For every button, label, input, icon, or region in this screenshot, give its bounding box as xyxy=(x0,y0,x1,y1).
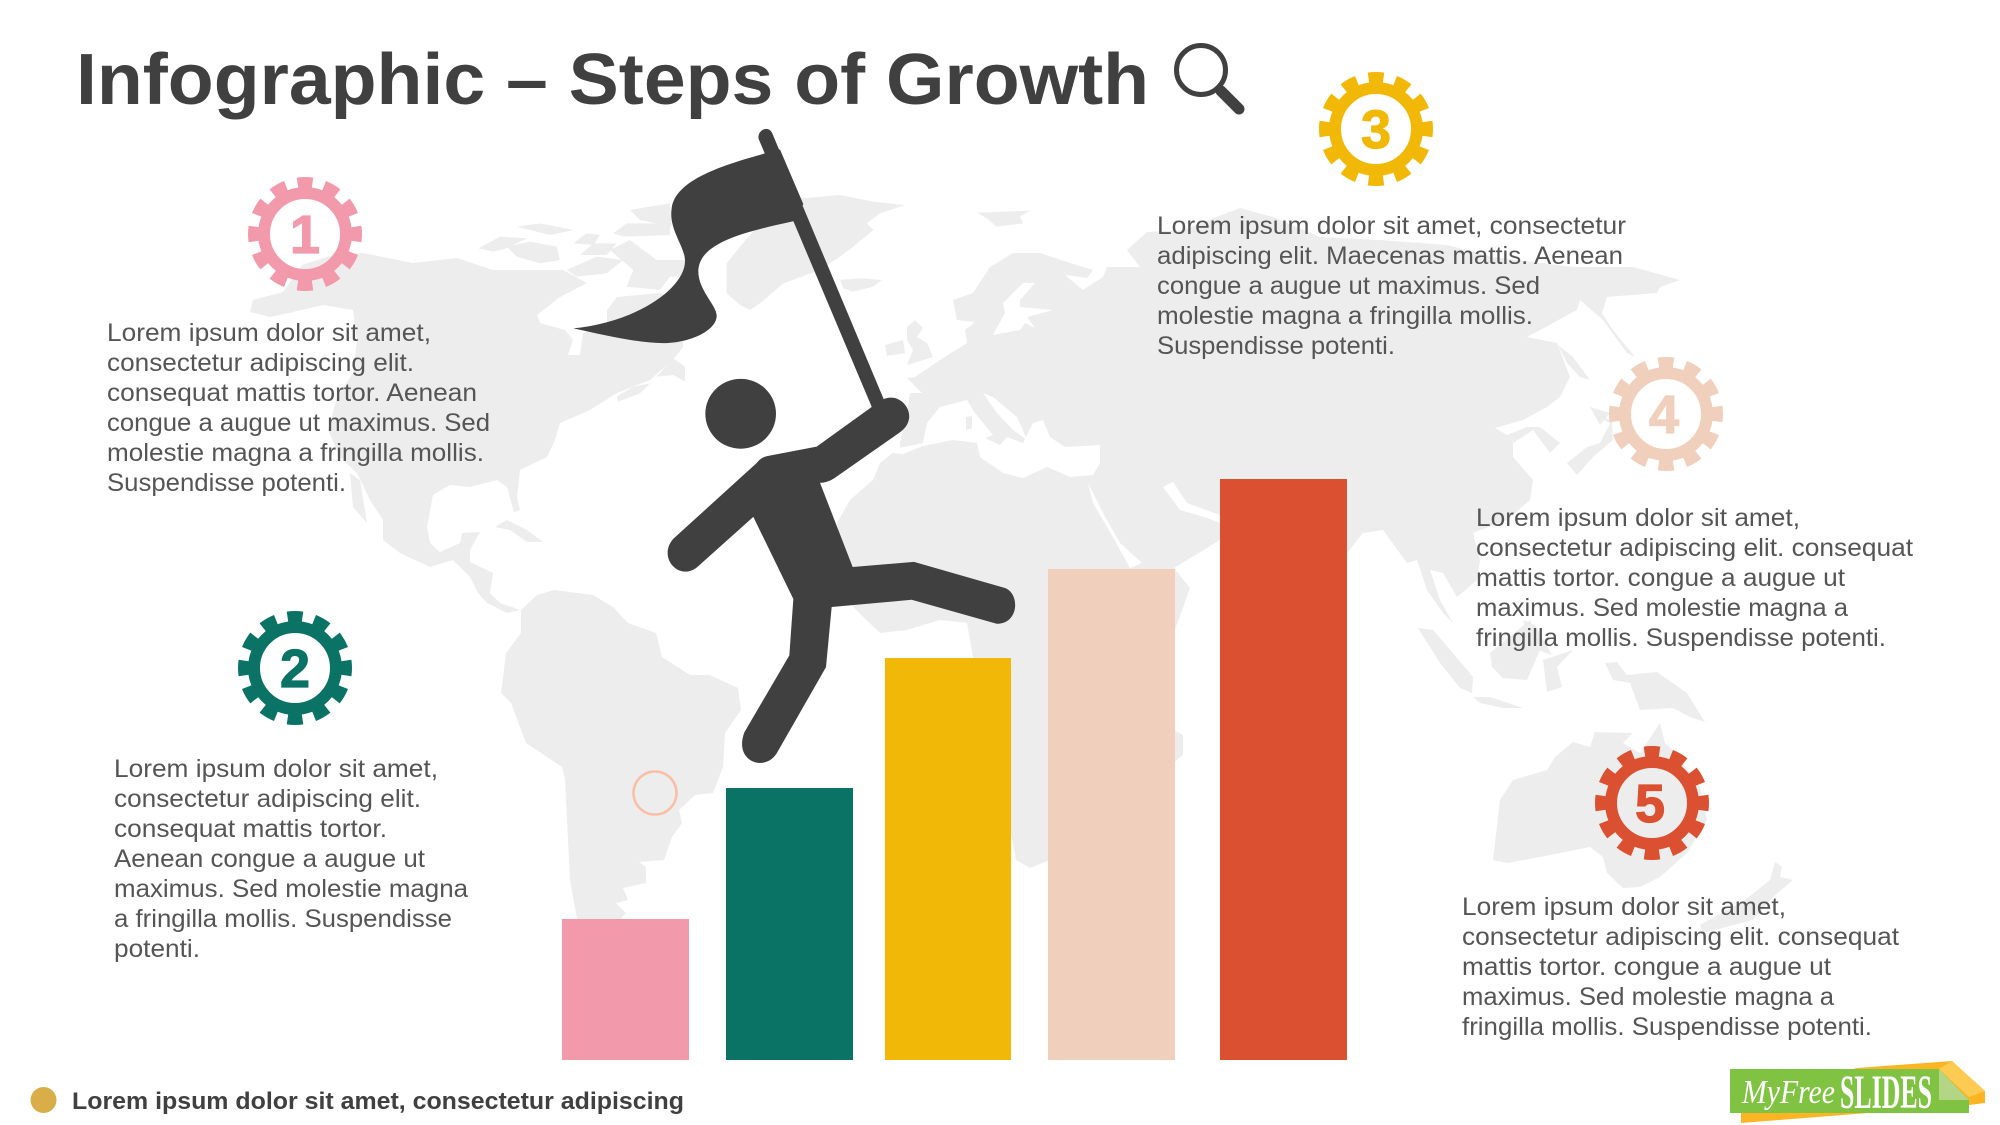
logo: MyFree Slides xyxy=(1730,1061,1985,1123)
text block 1: Suspendisse potenti. xyxy=(107,469,346,497)
text block 2: Lorem ipsum dolor sit amet, xyxy=(114,755,438,783)
text block 2: Aenean congue a augue ut xyxy=(114,845,425,873)
text block 1: Lorem ipsum dolor sit amet, xyxy=(107,319,431,347)
text block 3: Lorem ipsum dolor sit amet, consectetur xyxy=(1157,212,1626,240)
world map background xyxy=(250,195,1793,933)
bar chart: growth steps xyxy=(562,479,1347,1060)
text block 1: consectetur adipiscing elit. xyxy=(107,349,414,377)
text block 5: mattis tortor. congue a augue ut xyxy=(1462,953,1831,981)
text block 5: fringilla mollis. Suspendisse potenti. xyxy=(1462,1013,1872,1041)
icon: stick figure climbing with flag xyxy=(573,129,1015,763)
text block 3: molestie magna a fringilla mollis. xyxy=(1157,302,1533,330)
text block 4: Lorem ipsum dolor sit amet, xyxy=(1476,504,1800,532)
gear 2 badge xyxy=(244,617,346,719)
gear 1 badge: 1 xyxy=(290,205,320,265)
text block 5: maximus. Sed molestie magna a xyxy=(1462,983,1834,1011)
text block 5: consectetur adipiscing elit. consequat xyxy=(1462,923,1899,951)
icon: magnifying glass xyxy=(1176,46,1239,109)
text block 2: a fringilla mollis. Suspendisse xyxy=(114,905,452,933)
gear 2 badge: 2 xyxy=(280,639,310,699)
decorative ring marker xyxy=(634,772,676,814)
head xyxy=(705,379,776,449)
text block 2: maximus. Sed molestie magna xyxy=(114,875,468,903)
gear 4 badge: 4 xyxy=(1649,385,1679,445)
gear 3 badge xyxy=(1325,78,1427,180)
gear 3 badge: 3 xyxy=(1361,100,1391,160)
text block 3: adipiscing elit. Maecenas mattis. Aenean xyxy=(1157,242,1623,270)
text block 4: consectetur adipiscing elit. consequat xyxy=(1476,534,1913,562)
text block 1: consequat mattis tortor. Aenean xyxy=(107,379,477,407)
text block 4: mattis tortor. congue a augue ut xyxy=(1476,564,1845,592)
text block 3: Suspendisse potenti. xyxy=(1157,332,1395,360)
flag pole xyxy=(758,129,884,408)
logo: MyFree Slides: MyFree xyxy=(1741,1074,1835,1111)
flag xyxy=(573,149,803,343)
text block 1: molestie magna a fringilla mollis. xyxy=(107,439,484,467)
footer note: Lorem ipsum dolor sit amet, consectetur adipiscing xyxy=(72,1088,684,1115)
text block 5 xyxy=(1462,893,1899,1041)
gear 4 badge xyxy=(1615,363,1717,465)
text block 4: fringilla mollis. Suspendisse potenti. xyxy=(1476,624,1886,652)
text block 4 xyxy=(1476,504,1913,652)
text block 1: congue a augue ut maximus. Sed xyxy=(107,409,490,437)
text block 2: potenti. xyxy=(114,935,200,963)
body and limbs xyxy=(668,398,1015,763)
text block 1 xyxy=(107,319,490,497)
title: Infographic – Steps of Growth xyxy=(76,40,1149,120)
gear 5 badge: 5 xyxy=(1635,774,1665,834)
text block 2: consequat mattis tortor. xyxy=(114,815,387,843)
gear 5 badge xyxy=(1601,752,1703,854)
text block 3: congue a augue ut maximus. Sed xyxy=(1157,272,1540,300)
text block 2: consectetur adipiscing elit. xyxy=(114,785,421,813)
text block 2 xyxy=(114,755,468,963)
text block 4: maximus. Sed molestie magna a xyxy=(1476,594,1848,622)
gear 1 badge xyxy=(254,183,356,285)
text block 5: Lorem ipsum dolor sit amet, xyxy=(1462,893,1786,921)
text block 3 xyxy=(1157,212,1626,360)
